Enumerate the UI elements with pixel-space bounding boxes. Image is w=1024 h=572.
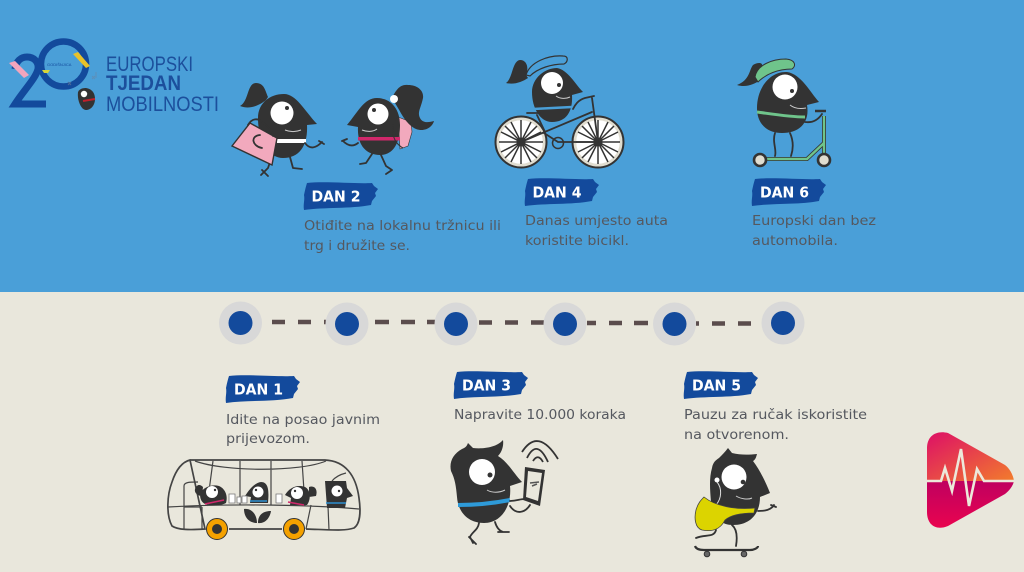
badge: DAN 5: DAN 5 <box>692 376 741 394</box>
panel: blue upper background <box>0 0 1024 292</box>
text: day 1 description <box>226 412 380 447</box>
text: day 3 description: Napravite 10.000 koraka <box>454 407 626 423</box>
badge: DAN 5 <box>684 371 758 399</box>
text: day 6 description: automobila. <box>752 233 838 249</box>
character: skateboarder with yellow bag <box>695 448 776 557</box>
character: walker with smartphone and signal <box>450 440 558 544</box>
text: day 2 description: Otiđite na lokalnu tržnicu ili <box>304 218 501 234</box>
logo: 20 years European Mobility Week: GODIŠNJICA <box>47 62 72 67</box>
text: day 5 description: Pauzu za ručak iskoristite <box>684 407 867 423</box>
logo: 20 years European Mobility Week: TJEDAN <box>106 72 181 95</box>
badge: DAN 1: DAN 1 <box>234 380 283 398</box>
timeline: dashed connector with six dots <box>219 302 804 346</box>
text: day 5 description <box>684 407 867 443</box>
character: cyclist on bicycle <box>496 56 624 168</box>
badge: DAN 4: DAN 4 <box>532 184 582 202</box>
text: day 2 description <box>304 218 501 254</box>
badge: DAN 2: DAN 2 <box>312 188 360 206</box>
character: rider on green scooter <box>737 59 830 166</box>
character: girl with pink shopping bag <box>232 83 324 176</box>
illustration: bus with passengers <box>168 460 360 540</box>
logo: red play button with pulse line <box>927 432 1014 528</box>
badge: DAN 3 <box>454 371 528 399</box>
text: day 4 description: Danas umjesto auta <box>525 213 668 229</box>
badge: DAN 2 <box>304 182 378 210</box>
logo: 20 years European Mobility Week: MOBILNOSTI <box>106 93 219 116</box>
text: day 4 description <box>525 213 668 249</box>
logo: 20 years European Mobility Week <box>9 42 219 116</box>
text: day 2 description: trg i družite se. <box>304 238 410 254</box>
text: day 5 description: na otvorenom. <box>684 427 789 443</box>
badge: DAN 3: DAN 3 <box>462 376 511 394</box>
text: day 6 description: Europski dan bez <box>752 213 876 229</box>
text: day 1 description: prijevozom. <box>226 431 310 447</box>
text: day 6 description <box>752 213 876 249</box>
panel: beige lower background <box>0 292 1024 572</box>
character: girl with pink backpack <box>342 85 434 174</box>
badge: DAN 6: DAN 6 <box>760 184 809 202</box>
badge: DAN 1 <box>226 375 300 403</box>
badge: DAN 6 <box>752 178 826 206</box>
logo: 20 years European Mobility Week: EUROPSKI <box>106 53 193 76</box>
text: day 4 description: koristite bicikl. <box>525 233 629 249</box>
text: day 1 description: Idite na posao javnim <box>226 412 380 428</box>
badge: DAN 4 <box>525 178 599 206</box>
